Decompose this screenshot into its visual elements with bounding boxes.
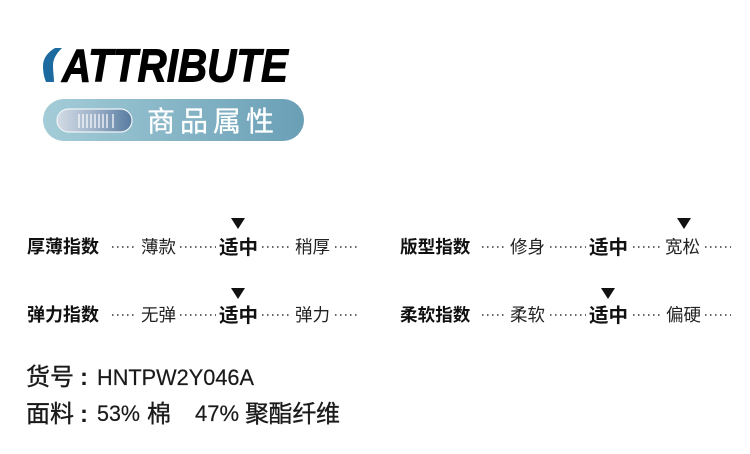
marker	[231, 218, 245, 229]
text: item number: HNTPW2Y046A	[97, 365, 254, 390]
label: 弹力指数	[27, 304, 99, 325]
indicator: 厚薄指数	[27, 218, 360, 259]
text: fabric composition: 面料	[26, 401, 74, 428]
option: 适中: 适中	[219, 305, 258, 327]
text: item number: 货号	[26, 364, 74, 391]
text: fabric composition: 棉	[147, 401, 171, 428]
label: 厚薄指数	[27, 236, 99, 257]
option: 适中: 适中	[589, 305, 628, 327]
banner pill	[43, 99, 304, 141]
marker	[601, 288, 615, 299]
text: item number: :	[80, 364, 88, 391]
icon: blue bracket	[43, 48, 62, 82]
option: 弹力: 弹力	[295, 305, 330, 325]
banner: 商品属性	[43, 99, 304, 141]
text: fabric composition: 47%	[195, 401, 239, 426]
label: 版型指数	[400, 237, 471, 257]
title text: ATTRIBUTE	[61, 40, 289, 92]
text: fabric composition	[26, 401, 340, 428]
marker	[677, 218, 691, 229]
heading: ATTRIBUTE	[43, 40, 289, 92]
option: 适中: 适中	[589, 237, 628, 259]
indicator: 版型指数	[400, 218, 731, 259]
icon: slider knob	[57, 109, 132, 132]
option: 偏硬: 偏硬	[666, 305, 701, 325]
option: 无弹: 无弹	[141, 305, 176, 325]
label: 柔软指数	[400, 305, 471, 325]
text: item number	[26, 364, 254, 391]
banner text: 商品属性	[147, 106, 279, 137]
option: 宽松: 宽松	[665, 237, 700, 257]
option: 柔软: 柔软	[510, 305, 545, 325]
option: 稍厚: 稍厚	[295, 237, 330, 257]
option: 适中: 适中	[219, 237, 258, 259]
indicator: 弹力指数	[27, 288, 360, 327]
text: fabric composition: 53%	[97, 401, 140, 426]
text: fabric composition: :	[80, 401, 88, 428]
indicator: 柔软指数	[400, 288, 731, 327]
option: 薄款: 薄款	[141, 237, 176, 257]
marker	[231, 288, 245, 299]
option: 修身: 修身	[510, 237, 545, 257]
text: fabric composition: 聚酯纤维	[245, 401, 340, 428]
